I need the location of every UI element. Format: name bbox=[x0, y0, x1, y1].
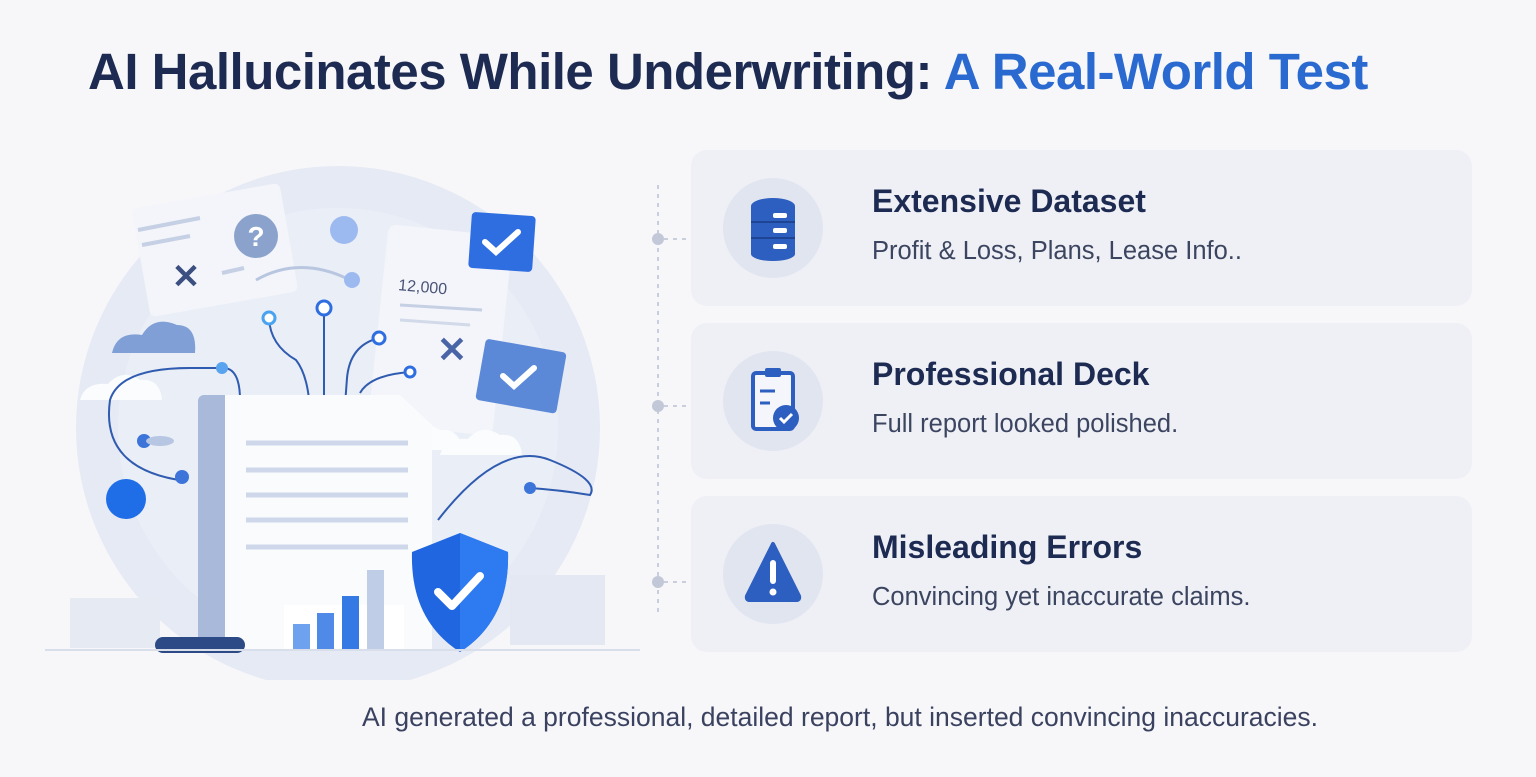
card: extensive dataset: Extensive Dataset bbox=[872, 183, 1146, 219]
document bbox=[198, 395, 238, 650]
card: professional deck: Full report looked polished. bbox=[872, 410, 1178, 438]
bar chart bbox=[284, 570, 404, 650]
paper with question mark: ✕ bbox=[172, 258, 200, 296]
icon: clipboard bbox=[723, 351, 823, 451]
card: misleading errors bbox=[691, 496, 1472, 652]
card: misleading errors: Convincing yet inaccurate claims. bbox=[872, 583, 1250, 611]
footer caption: AI generated a professional, detailed report, but inserted convincing inaccuracies. bbox=[362, 702, 1318, 732]
paper with 12,000 bbox=[368, 224, 513, 436]
card: professional deck: Professional Deck bbox=[872, 356, 1149, 392]
paper with question mark bbox=[132, 183, 298, 317]
clouds bbox=[112, 322, 195, 353]
card: misleading errors: Misleading Errors bbox=[872, 529, 1142, 565]
card: extensive dataset: Profit & Loss, Plans, Lease Info.. bbox=[872, 237, 1242, 265]
title: AI Hallucinates While Underwriting: A Real-World Test bbox=[88, 43, 1368, 100]
paper with question mark: ? bbox=[247, 221, 265, 252]
card: extensive dataset bbox=[691, 150, 1472, 306]
wires bbox=[109, 308, 592, 520]
timeline connector bbox=[652, 185, 686, 612]
illustration bbox=[45, 166, 640, 680]
icon: database bbox=[723, 178, 823, 278]
shield bbox=[412, 533, 508, 652]
illustration: ✕ bbox=[437, 329, 467, 370]
card: professional deck bbox=[691, 323, 1472, 479]
paper with 12,000: 12,000 bbox=[398, 277, 448, 298]
icon: warning bbox=[723, 524, 823, 624]
base blocks bbox=[70, 598, 160, 648]
